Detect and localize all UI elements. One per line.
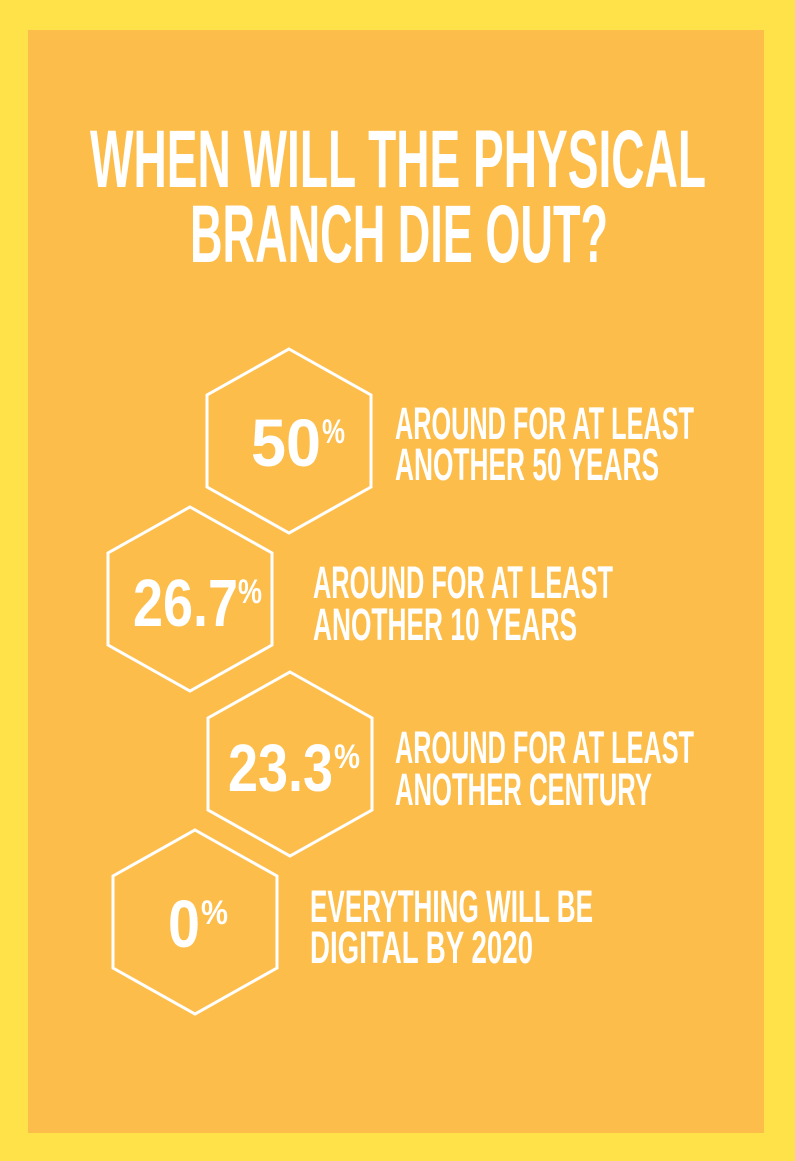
item: 0% — [113, 830, 593, 1014]
icon: hexagon 2 — [108, 507, 272, 691]
stat 26.7%: 26.7 — [133, 566, 238, 641]
stat 26.7%: % — [238, 573, 262, 611]
stat 50%: % — [322, 413, 345, 451]
item: 26.7% — [108, 507, 613, 691]
item: 23.3% — [208, 672, 694, 856]
label 4: EVERYTHING WILL BE — [310, 881, 593, 932]
label 2 — [313, 557, 613, 650]
label 4 — [310, 881, 593, 973]
stat 50%: 50 — [251, 406, 321, 481]
icon: hexagon 1 — [207, 349, 371, 533]
stat 0%: % — [201, 894, 228, 932]
icon: hexagon 3 — [208, 672, 372, 856]
label 1 — [395, 398, 694, 490]
icon: hexagon 4 — [113, 830, 277, 1014]
stat 0%: 0 — [168, 887, 200, 962]
stat 23.3%: 23.3 — [228, 731, 333, 806]
item: 50% — [207, 349, 694, 533]
stat 23.3%: % — [334, 738, 360, 776]
label 4: DIGITAL BY 2020 — [310, 922, 533, 973]
label 3 — [395, 722, 694, 815]
title — [90, 114, 706, 280]
stat 0% — [168, 887, 228, 962]
label 2: ANOTHER 10 YEARS — [313, 599, 577, 650]
